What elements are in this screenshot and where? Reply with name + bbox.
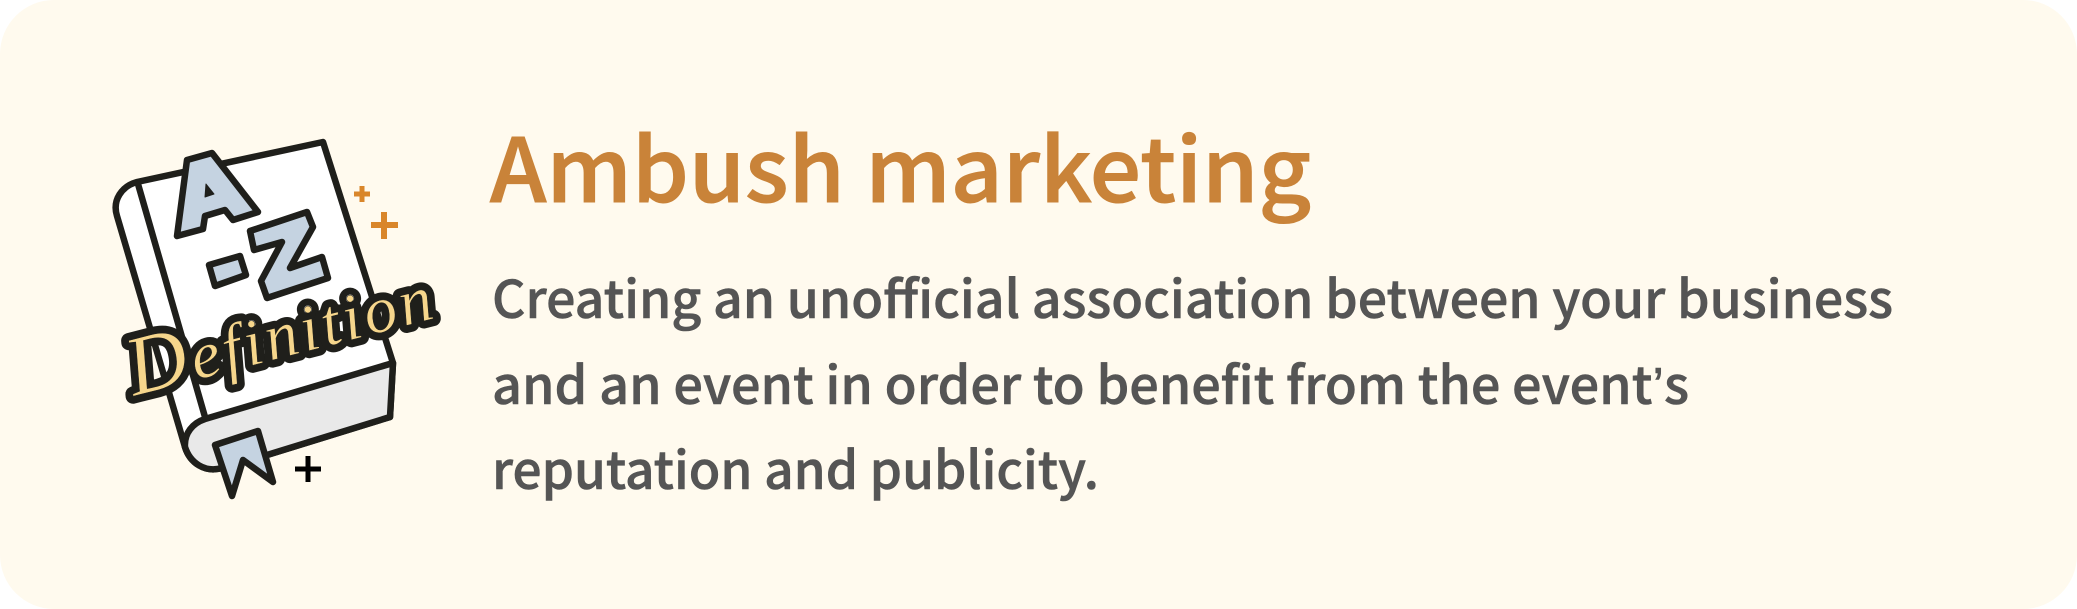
letter A [177, 153, 258, 236]
title: Ambush marketing [490, 101, 1311, 228]
word letters: Definition [115, 245, 444, 415]
line 3: reputation and publicity. [492, 429, 1099, 504]
sparkle: small orange plus [354, 186, 370, 202]
sparkle: black plus [295, 456, 321, 482]
icon label: Definition script word [115, 245, 444, 415]
letter A counter [205, 184, 214, 197]
book cover [116, 142, 393, 469]
page block [185, 363, 393, 469]
text block: definition [492, 258, 1893, 504]
sparkle: large orange plus [371, 212, 398, 239]
icon: dictionary book [116, 142, 398, 496]
bookmark ribbon [215, 431, 273, 496]
line 1: Creating an unofficial association between your business [492, 258, 1893, 333]
line 2: and an event in order to benefit from the event’s [492, 344, 1689, 419]
word outline: Definition [115, 245, 444, 415]
spine line [138, 184, 205, 417]
dash between letters [209, 256, 246, 286]
letter Z [250, 212, 328, 298]
